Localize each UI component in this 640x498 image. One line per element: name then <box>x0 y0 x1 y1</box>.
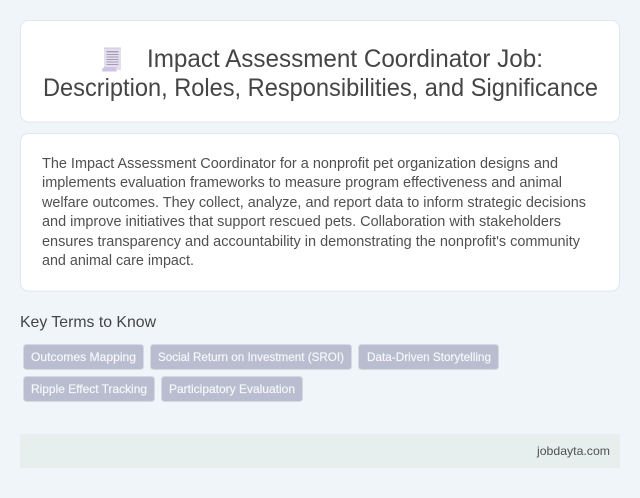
title: Impact Assessment Coordinator Job: <box>147 45 543 73</box>
footer bar <box>20 434 620 468</box>
panel: header card <box>20 20 620 122</box>
description text: welfare outcomes. They collect, analyze, and report data to inform strategic decisions <box>41 195 586 211</box>
description text: and improve initiatives that support rescued pets. Collaboration with stakeholders <box>42 214 561 230</box>
chip: data-driven storytelling: Data-Driven Storytelling <box>367 350 491 364</box>
icon: document scroll <box>102 48 121 72</box>
title: Description, Roles, Responsibilities, and Significance <box>43 74 598 102</box>
chip: participatory evaluation <box>162 376 302 402</box>
chip: outcomes mapping: Outcomes Mapping <box>31 350 136 364</box>
description text <box>41 156 586 269</box>
chip: ripple effect tracking <box>24 376 154 402</box>
title <box>43 45 598 102</box>
chip: participatory evaluation: Participatory Evaluation <box>169 382 295 396</box>
chip: SROI: Social Return on Investment (SROI) <box>158 350 344 364</box>
chip: SROI <box>150 344 352 370</box>
chip: data-driven storytelling <box>358 344 498 370</box>
chip: ripple effect tracking: Ripple Effect Tracking <box>31 382 147 396</box>
description text: and animal care impact. <box>42 253 194 269</box>
description text: implements evaluation frameworks to measure program effectiveness and animal <box>42 175 562 191</box>
description text: The Impact Assessment Coordinator for a nonprofit pet organization designs and <box>42 156 558 172</box>
footer source text: jobdayta.com <box>536 444 610 458</box>
chip: outcomes mapping <box>24 344 144 370</box>
description text: ensures transparency and accountability in demonstrating the nonprofit's community <box>42 234 581 250</box>
key term chips <box>24 344 498 402</box>
panel: description card <box>20 134 620 291</box>
heading: key terms: Key Terms to Know <box>20 314 156 331</box>
